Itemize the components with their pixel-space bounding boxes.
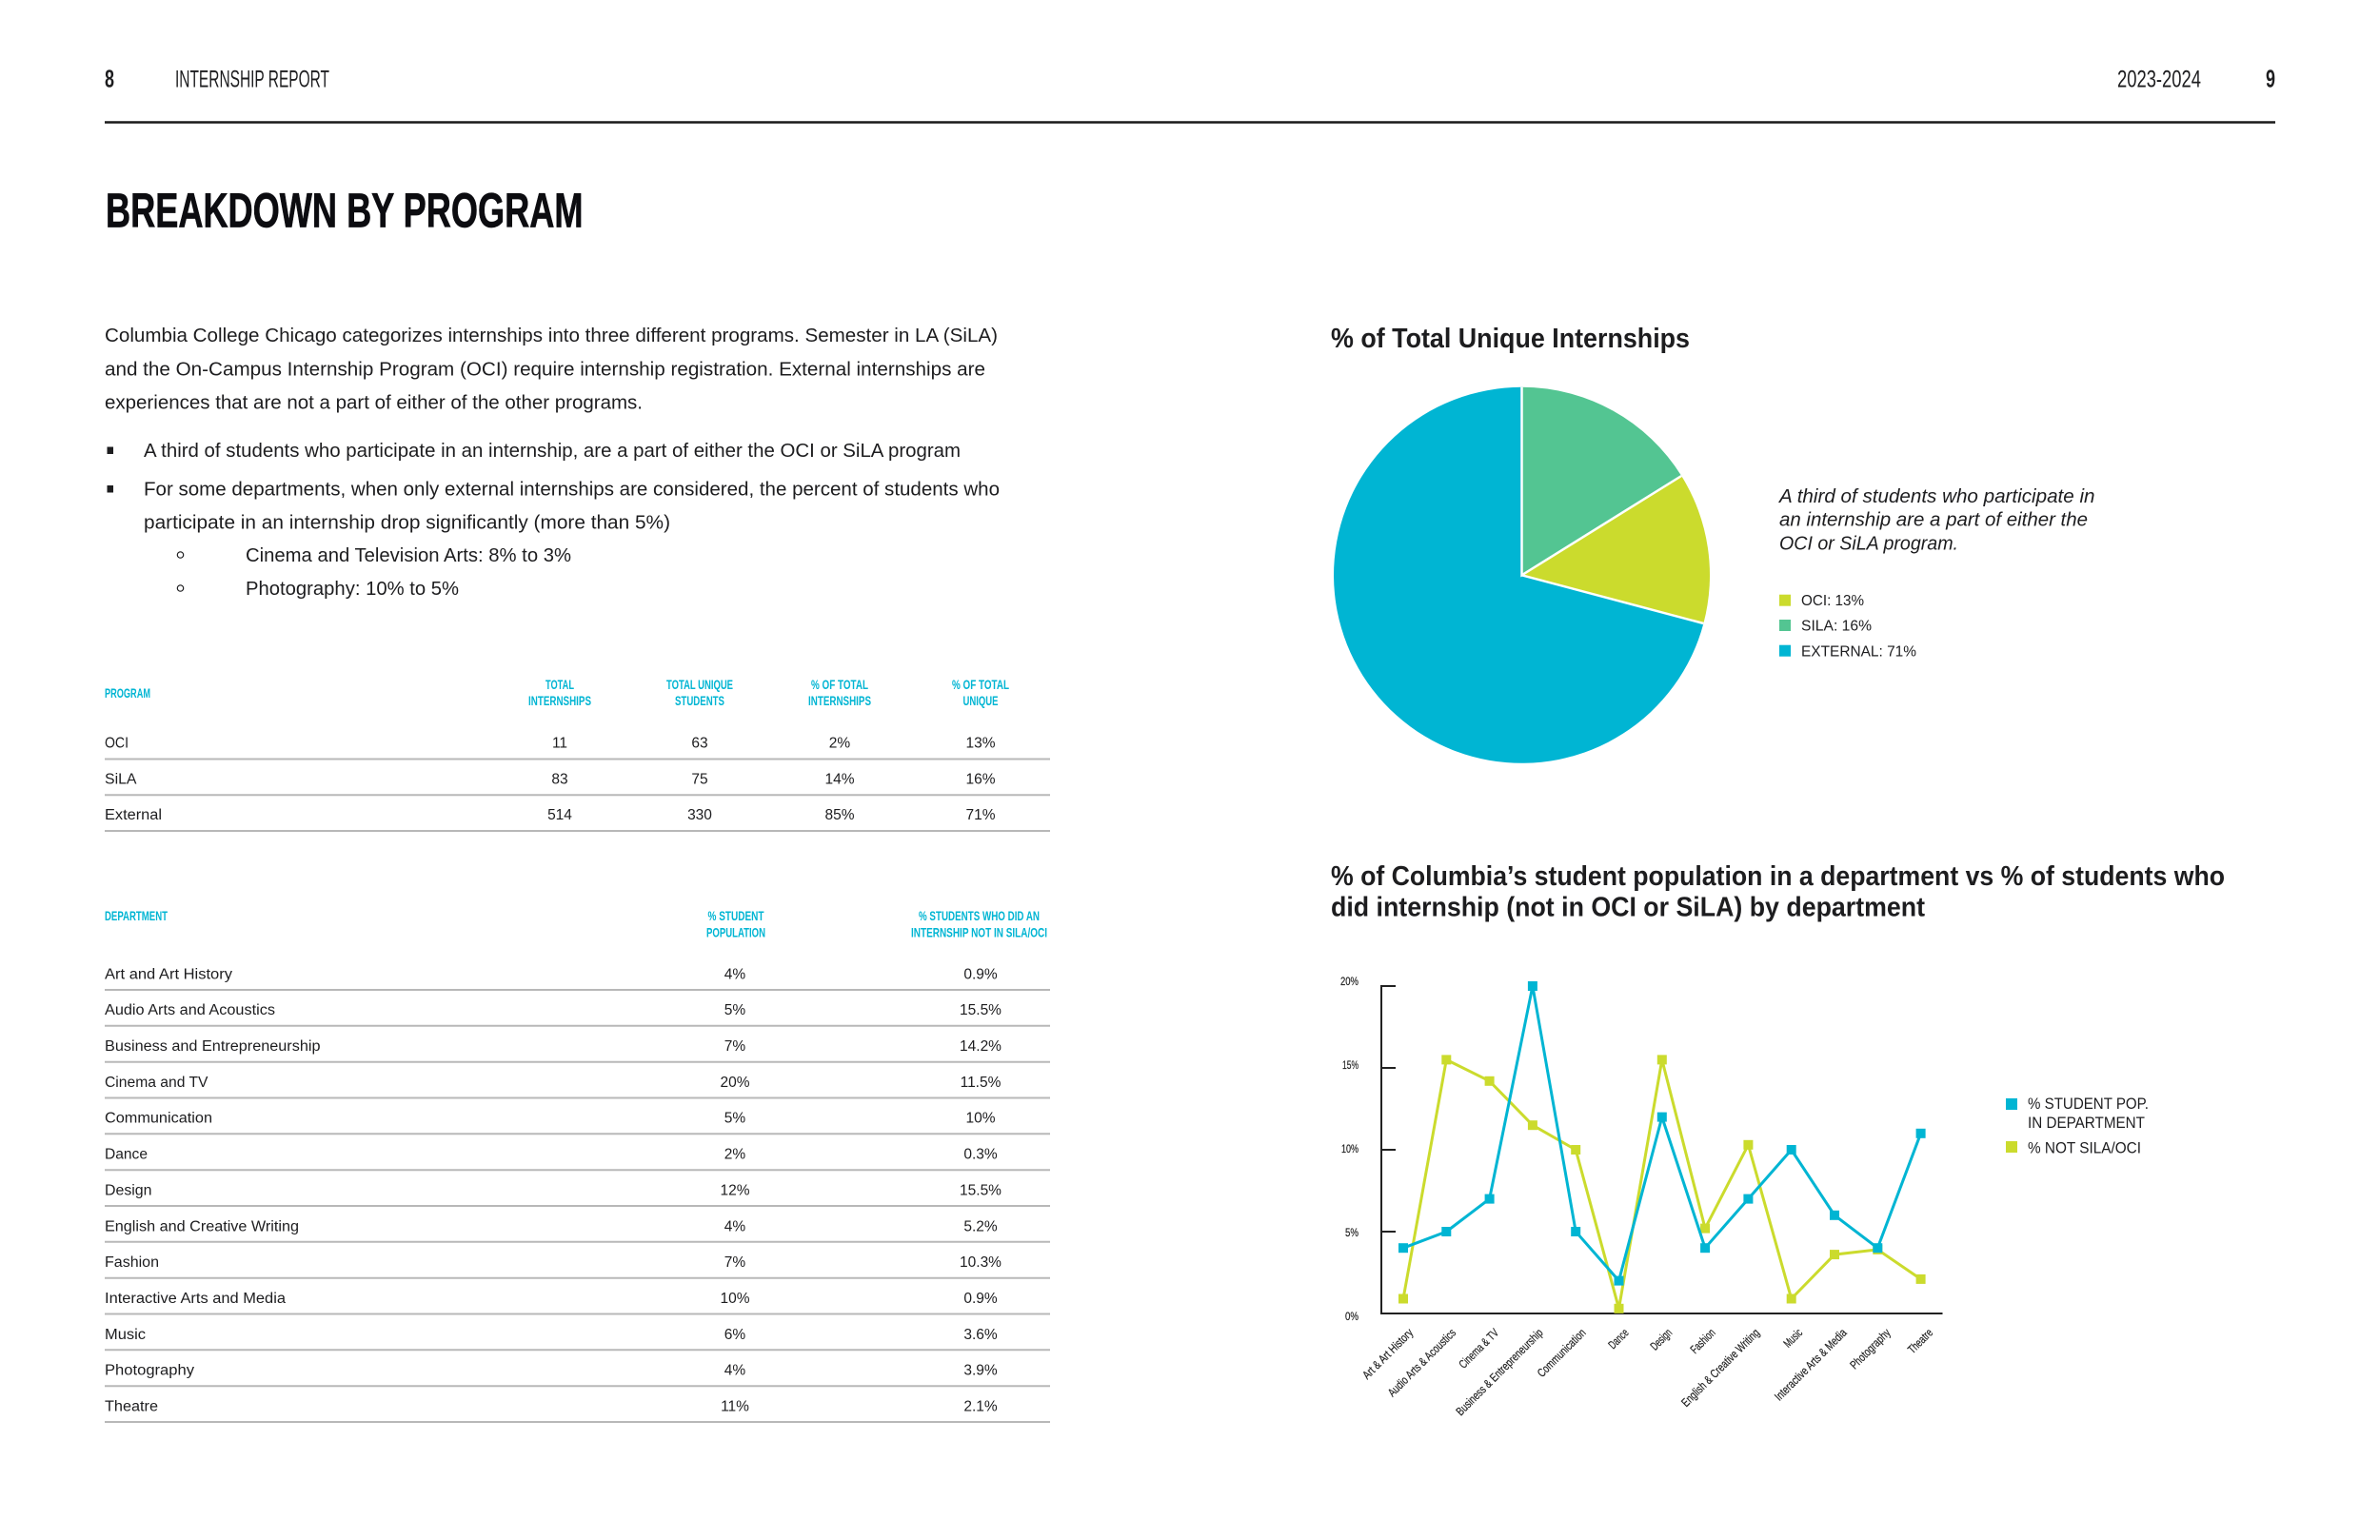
pie chart	[1334, 387, 1710, 763]
slice: external 71%	[1334, 387, 1703, 763]
row: Business and Entrepreneurship: 14.2%	[960, 1038, 1002, 1055]
report name: INTERNSHIP REPORT	[175, 67, 329, 93]
row: Audio Arts and Acoustics	[105, 1002, 1050, 1026]
row: External: 514	[547, 807, 572, 823]
table header row	[105, 908, 1047, 940]
row: Music	[105, 1327, 1050, 1350]
table: program	[105, 677, 1050, 831]
row: Photography: Photography	[105, 1363, 194, 1379]
intro paragraph	[105, 325, 998, 413]
x axis labels: Theatre	[1905, 1326, 1935, 1356]
row: Art and Art History: 4%	[724, 966, 745, 982]
row: English and Creative Writing	[105, 1218, 1050, 1242]
row: Design: 12%	[720, 1182, 750, 1198]
y axis labels: 15%	[1342, 1058, 1359, 1072]
row: Communication: Communication	[105, 1111, 212, 1127]
table header row: INTERNSHIP NOT IN SILA/OCI	[911, 925, 1047, 940]
series: % not SILA/OCI	[1398, 1055, 1926, 1313]
bullet list: Photography: 10% to 5%	[246, 578, 459, 600]
x axis labels: Music	[1781, 1326, 1805, 1351]
pie callout text: OCI or SiLA program.	[1779, 533, 1958, 554]
row: Design: Design	[105, 1182, 152, 1198]
y axis labels: 10%	[1341, 1142, 1359, 1155]
row: Fashion	[105, 1254, 1050, 1278]
intro paragraph: and the On-Campus Internship Program (OCI) require internship registration. External internships are	[105, 358, 985, 381]
row: Business and Entrepreneurship: 7%	[724, 1038, 745, 1055]
y axis labels: 0%	[1345, 1310, 1359, 1323]
row: OCI: 11	[552, 735, 567, 752]
left page number: 8	[105, 65, 114, 93]
row: Photography	[105, 1363, 1050, 1386]
row: SiLA: SiLA	[105, 771, 137, 787]
bullet list	[107, 440, 1000, 600]
row: Fashion: 7%	[724, 1254, 745, 1271]
line chart legend: % STUDENT POP.	[2028, 1095, 2149, 1113]
row: OCI	[105, 735, 1050, 760]
row: Dance: Dance	[105, 1147, 148, 1163]
report year: 2023-2024	[2117, 67, 2201, 93]
table header row: % STUDENTS WHO DID AN	[919, 908, 1040, 923]
table header row: STUDENTS	[675, 693, 724, 708]
x axis labels: Photography	[1848, 1326, 1894, 1372]
row: Theatre: Theatre	[105, 1399, 158, 1414]
row: Theatre: 2.1%	[963, 1399, 998, 1414]
x axis labels: Art & Art History	[1359, 1326, 1417, 1382]
row: External: 85%	[824, 807, 855, 823]
row: Audio Arts and Acoustics: 15.5%	[960, 1002, 1002, 1018]
row: Communication	[105, 1111, 1050, 1134]
row: Dance: 2%	[724, 1147, 745, 1163]
line chart legend: % NOT SILA/OCI	[2028, 1138, 2141, 1157]
pie legend: SILA: 16%	[1801, 619, 1872, 635]
axes and ticks	[1381, 986, 1942, 1313]
x axis labels: Communication	[1535, 1326, 1589, 1380]
row: Theatre	[105, 1399, 1050, 1422]
row: Business and Entrepreneurship	[105, 1038, 1050, 1062]
title: BREAKDOWN BY PROGRAM	[106, 183, 583, 238]
row: Dance	[105, 1147, 1050, 1170]
table header row	[105, 677, 1009, 708]
pie legend: OCI: 13%	[1801, 593, 1864, 609]
bullet list: A third of students who participate in an internship, are a part of either the OCI or SiLA program	[144, 440, 961, 462]
row: Interactive Arts and Media	[105, 1291, 1050, 1313]
line chart legend: IN DEPARTMENT	[2028, 1114, 2145, 1132]
line chart heading: % of Columbia’s student population in a department vs % of students who	[1331, 861, 2225, 892]
row: Cinema and TV: 11.5%	[961, 1075, 1002, 1091]
row: SiLA: 75	[691, 771, 708, 787]
y axis labels: 20%	[1340, 975, 1359, 988]
pie chart heading: % of Total Unique Internships	[1331, 324, 1690, 354]
row: Interactive Arts and Media: Interactive Arts and Media	[105, 1291, 286, 1307]
right page number: 9	[2266, 65, 2275, 93]
row: Theatre: 11%	[721, 1399, 749, 1414]
row: Fashion: Fashion	[105, 1254, 159, 1271]
row: SiLA	[105, 771, 1050, 795]
row: SiLA: 16%	[965, 771, 996, 787]
x axis labels: Design	[1648, 1326, 1675, 1353]
pie callout text	[1778, 486, 2094, 554]
x axis labels: Audio Arts & Acoustics	[1385, 1326, 1458, 1399]
x axis labels: Fashion	[1688, 1326, 1718, 1356]
table header row: DEPARTMENT	[105, 908, 168, 923]
row: Art and Art History: 0.9%	[963, 966, 998, 982]
row: SiLA: 14%	[824, 771, 855, 787]
table header row: TOTAL UNIQUE	[666, 677, 733, 692]
slice: SILA 16%	[1521, 387, 1681, 575]
slice: OCI 13%	[1521, 476, 1710, 623]
row: External: External	[105, 807, 162, 823]
row: Interactive Arts and Media: 10%	[720, 1291, 750, 1307]
intro paragraph: Columbia College Chicago categorizes internships into three different programs. Semester in LA (SiLA)	[105, 325, 998, 346]
row: External: 71%	[965, 807, 996, 823]
row: Cinema and TV: 20%	[720, 1075, 750, 1091]
row: Art and Art History	[105, 966, 1050, 990]
row: External	[105, 807, 1050, 831]
line chart	[1340, 975, 1942, 1418]
row: Music: 6%	[724, 1327, 745, 1343]
row: Audio Arts and Acoustics: Audio Arts and Acoustics	[105, 1002, 275, 1018]
x axis labels: Business & Entrepreneurship	[1454, 1326, 1546, 1418]
row: SiLA: 83	[551, 771, 568, 787]
row: OCI: OCI	[105, 735, 129, 752]
row: Interactive Arts and Media: 0.9%	[963, 1291, 998, 1307]
pie legend	[1779, 593, 1916, 660]
table header row: INTERNSHIPS	[808, 693, 871, 708]
row: External: 330	[687, 807, 712, 823]
series: % student population	[1398, 981, 1926, 1286]
y axis labels: 5%	[1345, 1226, 1359, 1239]
y axis labels	[1340, 975, 1359, 1323]
row: Cinema and TV	[105, 1075, 1050, 1098]
row: Music: Music	[105, 1327, 146, 1343]
row: Music: 3.6%	[963, 1327, 998, 1343]
row: Communication: 5%	[724, 1111, 745, 1127]
row: Design	[105, 1182, 1050, 1206]
row: English and Creative Writing: 5.2%	[963, 1218, 998, 1234]
line chart legend	[2006, 1095, 2149, 1157]
bullet list: For some departments, when only external internships are considered, the percent of students who	[144, 478, 1000, 501]
bullet list: participate in an internship drop significantly (more than 5%)	[144, 512, 670, 533]
table header row: TOTAL	[545, 677, 574, 692]
table header row: INTERNSHIPS	[528, 693, 591, 708]
table header row: POPULATION	[706, 925, 765, 940]
row: OCI: 2%	[829, 735, 850, 752]
table header row: % OF TOTAL	[811, 677, 868, 692]
row: Photography: 3.9%	[963, 1363, 998, 1379]
row: Dance: 0.3%	[963, 1147, 998, 1163]
row: Business and Entrepreneurship: Business and Entrepreneurship	[105, 1038, 320, 1055]
x axis labels: Cinema & TV	[1457, 1326, 1501, 1372]
table header row: PROGRAM	[105, 685, 150, 701]
x axis labels: English & Creative Writing	[1678, 1326, 1762, 1410]
row: Audio Arts and Acoustics: 5%	[724, 1002, 745, 1018]
bullet list: Cinema and Television Arts: 8% to 3%	[246, 544, 571, 566]
intro paragraph: experiences that are not a part of either of the other programs.	[105, 392, 643, 413]
pie legend: EXTERNAL: 71%	[1801, 643, 1916, 660]
row: Fashion: 10.3%	[960, 1254, 1002, 1271]
row: Art and Art History: Art and Art History	[105, 966, 232, 982]
row: English and Creative Writing: English and Creative Writing	[105, 1218, 299, 1234]
row: Communication: 10%	[965, 1111, 996, 1127]
x axis labels: Interactive Arts & Media	[1772, 1326, 1850, 1404]
pie callout text: an internship are a part of either the	[1779, 510, 2088, 531]
table header row: % STUDENT	[708, 908, 764, 923]
table header row: % OF TOTAL	[952, 677, 1009, 692]
row: English and Creative Writing: 4%	[724, 1218, 745, 1234]
row: Design: 15.5%	[960, 1182, 1002, 1198]
line chart heading	[1331, 861, 2225, 923]
row: Cinema and TV: Cinema and TV	[105, 1075, 208, 1091]
page header	[105, 65, 2275, 122]
pie callout text: A third of students who participate in	[1778, 486, 2094, 507]
x axis labels: Dance	[1606, 1326, 1632, 1352]
x axis labels	[1359, 1326, 1935, 1418]
table: department	[105, 908, 1050, 1422]
row: OCI: 13%	[965, 735, 996, 752]
row: OCI: 63	[691, 735, 708, 752]
row: Photography: 4%	[724, 1363, 745, 1379]
table header row: UNIQUE	[963, 693, 998, 708]
line chart heading: did internship (not in OCI or SiLA) by department	[1331, 893, 1925, 923]
